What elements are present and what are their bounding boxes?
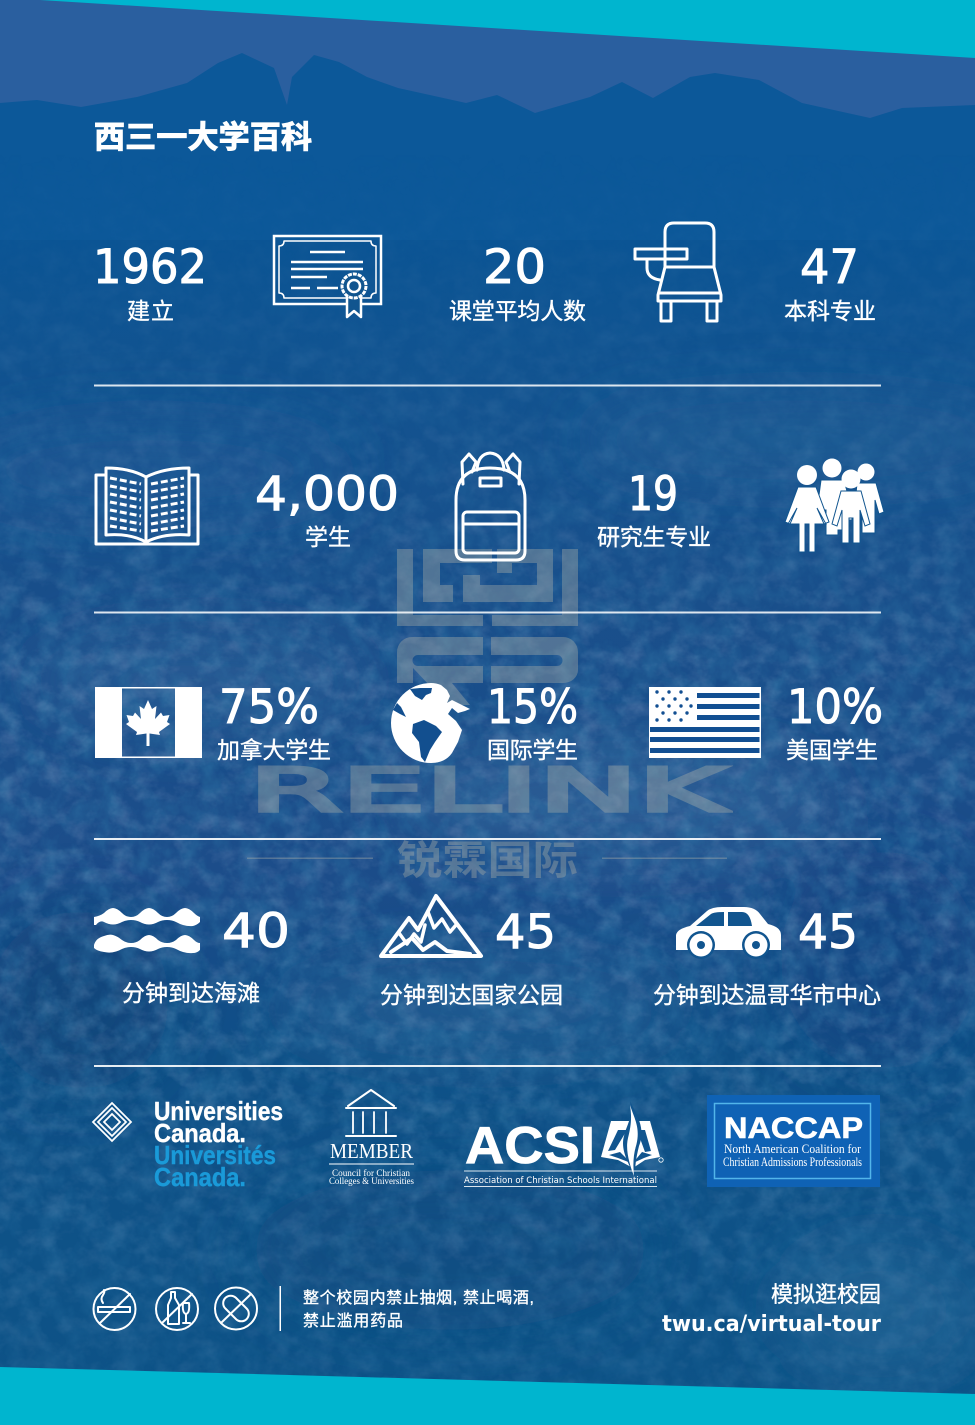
logo: Universities Canada: Canada. — [154, 1118, 246, 1148]
stat: 10% US students: 美国学生 — [786, 737, 878, 763]
stat: 75% Canadian students: 75% — [219, 680, 319, 735]
stat: 4,000 students: 学生 — [305, 524, 351, 550]
campus policy text — [303, 1289, 534, 1330]
stat: 45 minutes to national park: 分钟到达国家公园 — [380, 982, 563, 1008]
watermark: RELINK logo — [247, 549, 729, 883]
stat: 45 minutes to downtown Vancouver — [653, 905, 881, 1008]
stat: 15% international students: 15% — [487, 680, 578, 735]
icon: diploma certificate — [274, 236, 381, 317]
watermark: RELINK logo: 锐霖国际 — [397, 839, 578, 883]
logo: CCCU member: MEMBER — [330, 1139, 413, 1163]
icon: school desk chair — [635, 223, 721, 321]
icon: no smoking — [94, 1288, 136, 1330]
logo: CCCU member: Council for Christian — [332, 1168, 410, 1179]
stat: 10% US students — [786, 680, 883, 763]
campus policy text: 整个校园内禁止抽烟, 禁止喝酒, — [303, 1289, 534, 1307]
icon: US flag — [649, 687, 761, 758]
logo: Universities Canada: Universities — [154, 1096, 283, 1126]
icon: backpack — [456, 453, 525, 560]
logo: Universities Canada: Universités — [154, 1140, 276, 1170]
stat: 45 minutes to national park: 45 — [495, 905, 556, 960]
stat: 45 minutes to national park — [380, 905, 563, 1008]
campus policy text: 禁止滥用药品 — [303, 1312, 403, 1330]
stat: 10% US students: 10% — [787, 680, 883, 735]
icon: waves — [94, 908, 200, 953]
icon: car — [676, 907, 781, 959]
icon: no drugs — [215, 1288, 257, 1330]
logo: NACCAP: Christian Admissions Professionals — [723, 1154, 862, 1169]
top teal band — [40, 0, 975, 58]
stat: founded 1962: 1962 — [93, 240, 207, 295]
stat: 40 minutes to beach — [122, 904, 290, 1006]
stat: 75% Canadian students: 加拿大学生 — [217, 737, 331, 763]
stat: graduate programs: 19 — [628, 467, 678, 522]
stat: 40 minutes to beach: 分钟到达海滩 — [122, 980, 260, 1006]
stat: 45 minutes to downtown Vancouver: 分钟到达温哥华市中心 — [653, 982, 881, 1008]
stat: average class size: 课堂平均人数 — [449, 298, 586, 324]
stat: average class size — [449, 240, 586, 324]
stat: 40 minutes to beach: 40 — [222, 904, 290, 959]
virtual tour link: 模拟逛校园 — [771, 1282, 881, 1307]
virtual tour link: twu.ca/virtual-tour — [662, 1312, 881, 1337]
stat: 75% Canadian students — [217, 680, 331, 763]
icon: globe — [391, 683, 470, 763]
logo: Universities Canada — [93, 1096, 283, 1192]
stat: 4,000 students: 4,000 — [255, 467, 399, 522]
watermark: RELINK logo: RELINK — [249, 756, 729, 826]
logo: NACCAP: North American Coalition for — [724, 1141, 862, 1156]
icon: no alcohol — [156, 1288, 198, 1330]
logo: CCCU member — [329, 1090, 414, 1187]
bottom teal band — [0, 1367, 975, 1425]
title: 西三一大学百科 — [94, 120, 312, 155]
logo: CCCU member: Colleges & Universities — [329, 1177, 414, 1187]
stat: graduate programs: 研究生专业 — [597, 524, 711, 550]
stat: founded 1962 — [93, 240, 207, 324]
logo: NACCAP — [707, 1095, 880, 1187]
stat: undergraduate majors: 本科专业 — [784, 298, 876, 324]
stat: average class size: 20 — [483, 240, 546, 295]
stat: 15% international students — [487, 680, 578, 763]
icon: Canadian flag — [95, 687, 202, 758]
stat: graduate programs — [597, 467, 711, 550]
stat: founded 1962: 建立 — [127, 298, 174, 324]
divider — [94, 612, 881, 614]
divider — [94, 838, 881, 840]
stat: 15% international students: 国际学生 — [487, 737, 578, 763]
stat: undergraduate majors: 47 — [800, 240, 859, 295]
virtual tour link — [662, 1282, 881, 1337]
icon: group of people — [785, 458, 884, 552]
stat: undergraduate majors — [784, 240, 876, 324]
logo: ACSI — [464, 1101, 663, 1187]
stat: 4,000 students — [255, 467, 399, 550]
divider — [94, 384, 881, 386]
logo: Universities Canada: Canada. — [154, 1162, 246, 1192]
logo: ACSI: ACSI — [465, 1117, 595, 1175]
divider — [94, 1065, 881, 1067]
stat: 45 minutes to downtown Vancouver: 45 — [798, 905, 858, 960]
icon: open book — [96, 468, 198, 544]
logo: ACSI: Association of Christian Schools International — [464, 1176, 657, 1186]
logo: NACCAP: NACCAP — [724, 1112, 863, 1145]
icon: mountains — [381, 896, 481, 956]
divider: policy — [280, 1286, 281, 1331]
